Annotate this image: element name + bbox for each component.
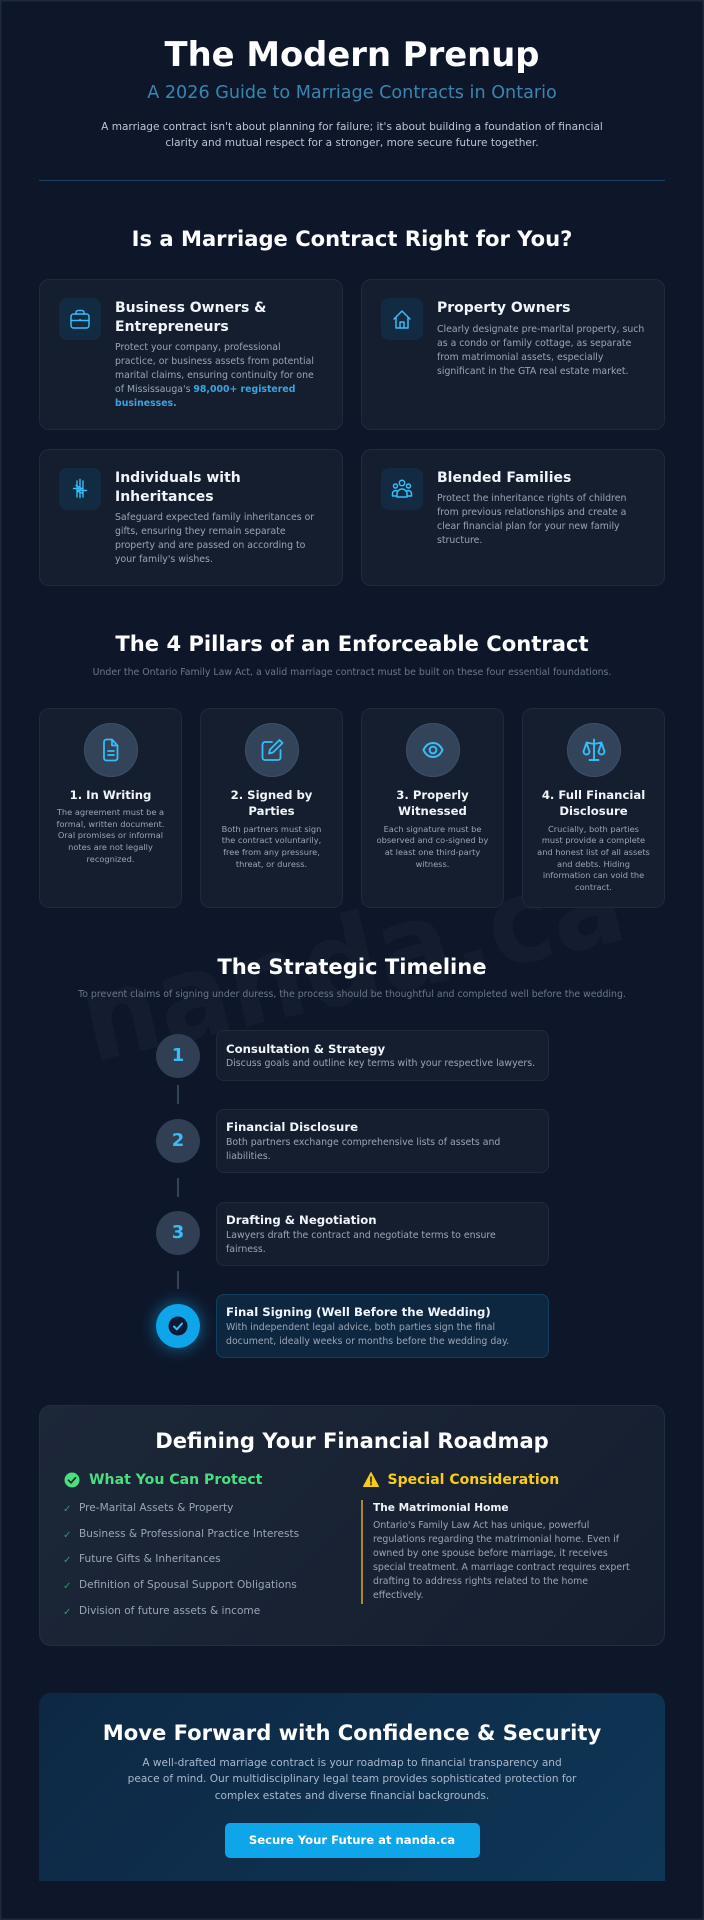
pillar text: and honest list of all assets — [537, 847, 650, 857]
callout text: effectively. — [373, 1590, 423, 1601]
timeline intro: To prevent claims of signing under duress, the process should be thoughtful and completed well before the wedding. — [78, 989, 626, 1000]
pillar text — [56, 807, 164, 864]
pillar title: 4. Full Financial — [542, 788, 645, 802]
step 3 marker: 3 — [172, 1222, 184, 1243]
check: ✓ — [63, 1530, 71, 1541]
panel: pillar properly witnessed — [361, 708, 504, 908]
pillar text: at least one third-party — [385, 847, 480, 857]
card title: Individuals with — [115, 470, 241, 486]
card text: structure. — [437, 535, 482, 546]
pillar title — [396, 788, 469, 818]
card text: marital claims, ensuring continuity for one — [115, 370, 314, 381]
pillar text: the contract voluntarily, — [222, 835, 321, 845]
step text — [226, 1322, 509, 1347]
step text: Both partners exchange comprehensive lists of assets and — [226, 1137, 500, 1148]
panel: blended families — [361, 449, 665, 586]
pillar text: and debts. Hiding — [557, 859, 630, 869]
panel: individuals with inheritances — [39, 449, 343, 586]
step text — [226, 1230, 496, 1255]
callout text — [373, 1520, 630, 1601]
icon: green check — [64, 1472, 80, 1488]
icon: scales — [566, 723, 620, 777]
step 2 marker — [156, 1119, 200, 1163]
icon: briefcase — [59, 298, 101, 340]
pillar text: free from any pressure, — [223, 847, 320, 857]
pillar title — [231, 788, 312, 818]
pillar text: Each signature must be — [384, 824, 481, 834]
card text: businesses. — [115, 398, 177, 409]
card text: property and are passed on according to — [115, 540, 305, 551]
card title: Business Owners & — [115, 300, 266, 316]
pillar title: 2. Signed by — [231, 788, 312, 802]
cta heading: Move Forward with Confidence & Security — [103, 1720, 601, 1745]
pillar text: notes are not legally — [68, 842, 153, 852]
step 4 card — [216, 1294, 549, 1358]
card text: Safeguard expected family inheritances or — [115, 512, 314, 523]
step 2 card — [216, 1109, 549, 1173]
pillars intro: Under the Ontario Family Law Act, a valid marriage contract must be built on these four essential foundations. — [93, 666, 611, 678]
check: ✓ — [63, 1555, 71, 1566]
icon: house — [381, 298, 423, 340]
check: ✓ — [63, 1607, 71, 1618]
card title: Blended Families — [437, 470, 571, 486]
pillar text: must provide a complete — [542, 835, 645, 845]
card text: Protect the inheritance rights of children — [437, 493, 626, 504]
check: ✓ — [63, 1504, 71, 1515]
cta text — [128, 1757, 576, 1802]
card text: practice, or business assets from potential — [115, 356, 314, 367]
step 2 marker: 2 — [172, 1130, 184, 1151]
panel: pillar signed by parties — [200, 708, 343, 908]
pillar text: information can void the — [543, 870, 644, 880]
cta text: complex estates and diverse financial backgrounds. — [215, 1790, 489, 1802]
icon: warning — [363, 1472, 379, 1487]
callout: matrimonial home — [361, 1500, 648, 1604]
card text: Clearly designate pre-marital property, such — [437, 324, 644, 334]
panel: call to action — [39, 1693, 665, 1881]
card title: Inheritances — [115, 489, 214, 505]
step text — [226, 1137, 500, 1162]
step 1 card — [216, 1030, 549, 1081]
watermark: nanda.ca — [68, 831, 636, 1089]
callout text: Ontario's Family Law Act has unique, powerful — [373, 1520, 589, 1530]
roadmap heading: Defining Your Financial Roadmap — [155, 1428, 549, 1453]
cta button: Secure Your Future at nanda.ca — [249, 1832, 455, 1846]
icon: inheritance glyph — [59, 468, 101, 510]
step text: With independent legal advice, both parties sign the final — [226, 1322, 495, 1333]
callout text: owned by one spouse before marriage, it receives — [373, 1548, 608, 1559]
protect heading: What You Can Protect — [89, 1472, 262, 1488]
pillar text: Both partners must sign — [222, 824, 321, 834]
heading: is a marriage contract right for you: Is a Marriage Contract Right for You? — [132, 226, 572, 251]
card text — [437, 324, 644, 376]
list item: Definition of Spousal Support Obligations — [79, 1579, 297, 1591]
intro text — [101, 121, 603, 149]
card title: Entrepreneurs — [115, 319, 229, 335]
card text: of Mississauga's 98,000+ registered — [115, 384, 295, 395]
subtitle: A 2026 Guide to Marriage Contracts in Ontario — [147, 83, 557, 103]
card text: significant in the GTA real estate market. — [437, 366, 628, 376]
step text: Lawyers draft the contract and negotiate terms to ensure — [226, 1230, 496, 1241]
card title — [115, 470, 241, 505]
card text: as a condo or family cottage, as separate — [437, 338, 631, 348]
heading: four pillars: The 4 Pillars of an Enforceable Contract — [115, 631, 589, 656]
pillar text: The agreement must be a — [57, 807, 164, 817]
card text: Protect your company, professional — [115, 342, 281, 353]
card text: your family's wishes. — [115, 554, 213, 565]
pillar title: 1. In Writing — [70, 788, 151, 802]
connector — [177, 1271, 179, 1289]
intro text: A marriage contract isn't about planning for failure; it's about building a foundation of financial — [101, 121, 603, 133]
pillar title: 3. Properly — [396, 788, 469, 802]
pillar title — [542, 788, 645, 818]
step title: Financial Disclosure — [226, 1120, 358, 1134]
step 4 marker: check — [156, 1304, 200, 1348]
step title: Drafting & Negotiation — [226, 1212, 377, 1226]
card title — [115, 300, 266, 335]
pillar title: Witnessed — [398, 804, 467, 818]
protect list — [63, 1502, 299, 1618]
card text — [115, 512, 314, 565]
heading: strategic timeline: The Strategic Timeline — [217, 954, 487, 979]
title: The Modern Prenup — [165, 35, 539, 74]
cta text: peace of mind. Our multidisciplinary legal team provides sophisticated protection for — [128, 1773, 576, 1785]
pillar text: formal, written document. — [57, 819, 164, 829]
callout text: special treatment. A marriage contract requires expert — [373, 1562, 630, 1573]
callout title: The Matrimonial Home — [373, 1502, 509, 1514]
connector — [177, 1085, 179, 1104]
panel: pillar in writing — [39, 708, 182, 908]
list item: Division of future assets & income — [79, 1605, 260, 1617]
card text: from previous relationships and create a — [437, 507, 626, 518]
card text: from matrimonial assets, especially — [437, 352, 603, 362]
pillar text: observed and co-signed by — [377, 835, 488, 845]
card text: clear financial plan for your new family — [437, 521, 620, 532]
step title: Consultation & Strategy — [226, 1042, 385, 1056]
pillar text: Oral promises or informal — [58, 830, 163, 840]
list item: Pre-Marital Assets & Property — [79, 1502, 233, 1514]
panel: business owners — [39, 279, 343, 430]
connector — [177, 1178, 179, 1197]
pillar text — [537, 824, 650, 892]
step 1 marker — [156, 1034, 200, 1078]
pillar text: threat, or duress. — [236, 859, 307, 869]
card title: Property Owners — [437, 300, 570, 316]
check: ✓ — [63, 1581, 71, 1592]
icon: family group — [381, 468, 423, 510]
card text — [437, 493, 626, 546]
cta button — [224, 1822, 480, 1858]
step text: document, ideally weeks or months before the wedding day. — [226, 1336, 509, 1347]
pillar text: recognized. — [87, 854, 134, 864]
pillar text — [377, 824, 488, 869]
card text — [115, 342, 314, 409]
icon: eye — [406, 723, 460, 777]
step text: fairness. — [226, 1244, 266, 1255]
callout text: drafting to address rights related to the home — [373, 1576, 588, 1587]
step 1 marker: 1 — [172, 1045, 184, 1066]
special heading: Special Consideration — [388, 1472, 559, 1488]
header divider — [39, 180, 665, 181]
panel: property owners — [361, 279, 665, 430]
intro text: clarity and mutual respect for a stronger, more secure future together. — [165, 137, 539, 149]
panel: financial roadmap — [39, 1405, 665, 1646]
callout text: regulations regarding the matrimonial home. Even if — [373, 1534, 619, 1545]
pillar title: Parties — [248, 804, 295, 818]
step title: Final Signing (Well Before the Wedding) — [226, 1304, 491, 1318]
pillar text: witness. — [416, 859, 449, 869]
icon: document — [84, 723, 138, 777]
pillar text: Crucially, both parties — [548, 824, 639, 834]
card text: gifts, ensuring they remain separate — [115, 526, 286, 537]
panel: pillar full financial disclosure — [522, 708, 665, 908]
cta text: A well-drafted marriage contract is your roadmap to financial transparency and — [142, 1757, 562, 1769]
pillar title: Disclosure — [559, 804, 628, 818]
step text: Discuss goals and outline key terms with your respective lawyers. — [226, 1058, 535, 1069]
list item: Business & Professional Practice Interests — [79, 1528, 299, 1540]
pillar text: contract. — [575, 882, 612, 892]
list item: Future Gifts & Inheritances — [79, 1553, 221, 1565]
step 3 card — [216, 1202, 549, 1266]
step text: liabilities. — [226, 1151, 271, 1162]
pillar text — [222, 824, 321, 869]
icon: pencil square — [244, 723, 298, 777]
step 3 marker — [156, 1211, 200, 1255]
